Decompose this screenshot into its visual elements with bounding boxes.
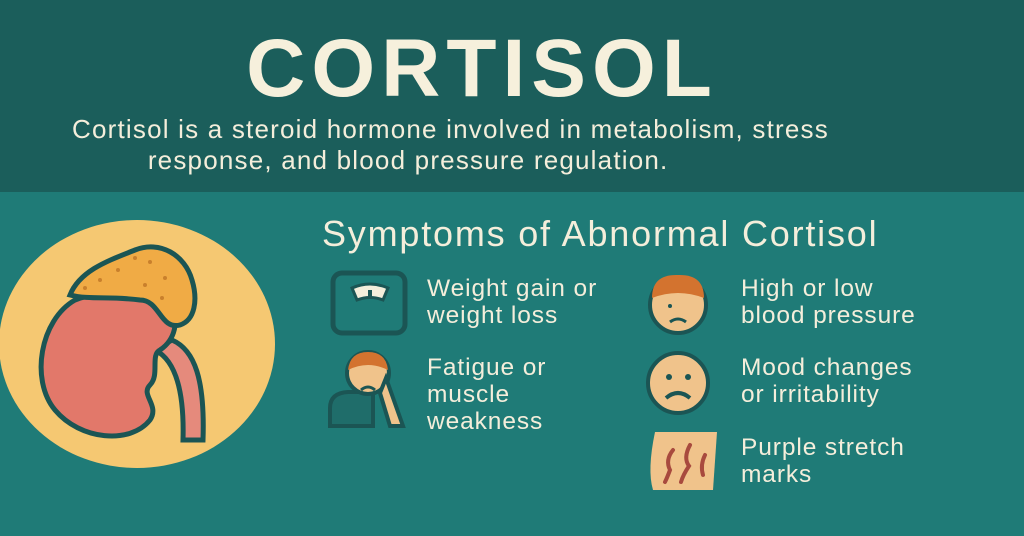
item: fatigue: weakness (427, 408, 543, 435)
item: stretch marks (741, 434, 905, 488)
header band (0, 0, 1024, 192)
item: mood: or irritability (741, 381, 880, 408)
subtitle description (72, 114, 829, 175)
item: fatigue (427, 354, 546, 435)
subtitle description: response, and blood pressure regulation. (148, 145, 668, 175)
item: mood: Mood changes (741, 354, 913, 381)
item: blood pressure (741, 275, 916, 329)
item: stretch marks: marks (741, 461, 812, 488)
item: blood pressure: blood pressure (741, 302, 916, 329)
section heading: Symptoms of Abnormal Cortisol (322, 213, 878, 254)
item: weight (427, 275, 597, 329)
item: fatigue: muscle (427, 381, 510, 408)
subtitle description: Cortisol is a steroid hormone involved in metabolism, stress (72, 114, 829, 144)
item: weight: Weight gain or (427, 275, 597, 302)
illustration: adrenal gland on kidney (0, 220, 275, 468)
icon: worried face (648, 275, 708, 335)
icon: tired person (328, 350, 406, 428)
item: mood (741, 354, 913, 408)
icon: sad face (646, 351, 710, 415)
item: fatigue: Fatigue or (427, 354, 546, 381)
item: weight: weight loss (427, 302, 558, 329)
item: stretch marks: Purple stretch (741, 434, 905, 461)
title: CORTISOL (246, 23, 718, 114)
item: blood pressure: High or low (741, 275, 873, 302)
icon: stretch marks (650, 432, 717, 490)
icon: scale (330, 270, 408, 336)
